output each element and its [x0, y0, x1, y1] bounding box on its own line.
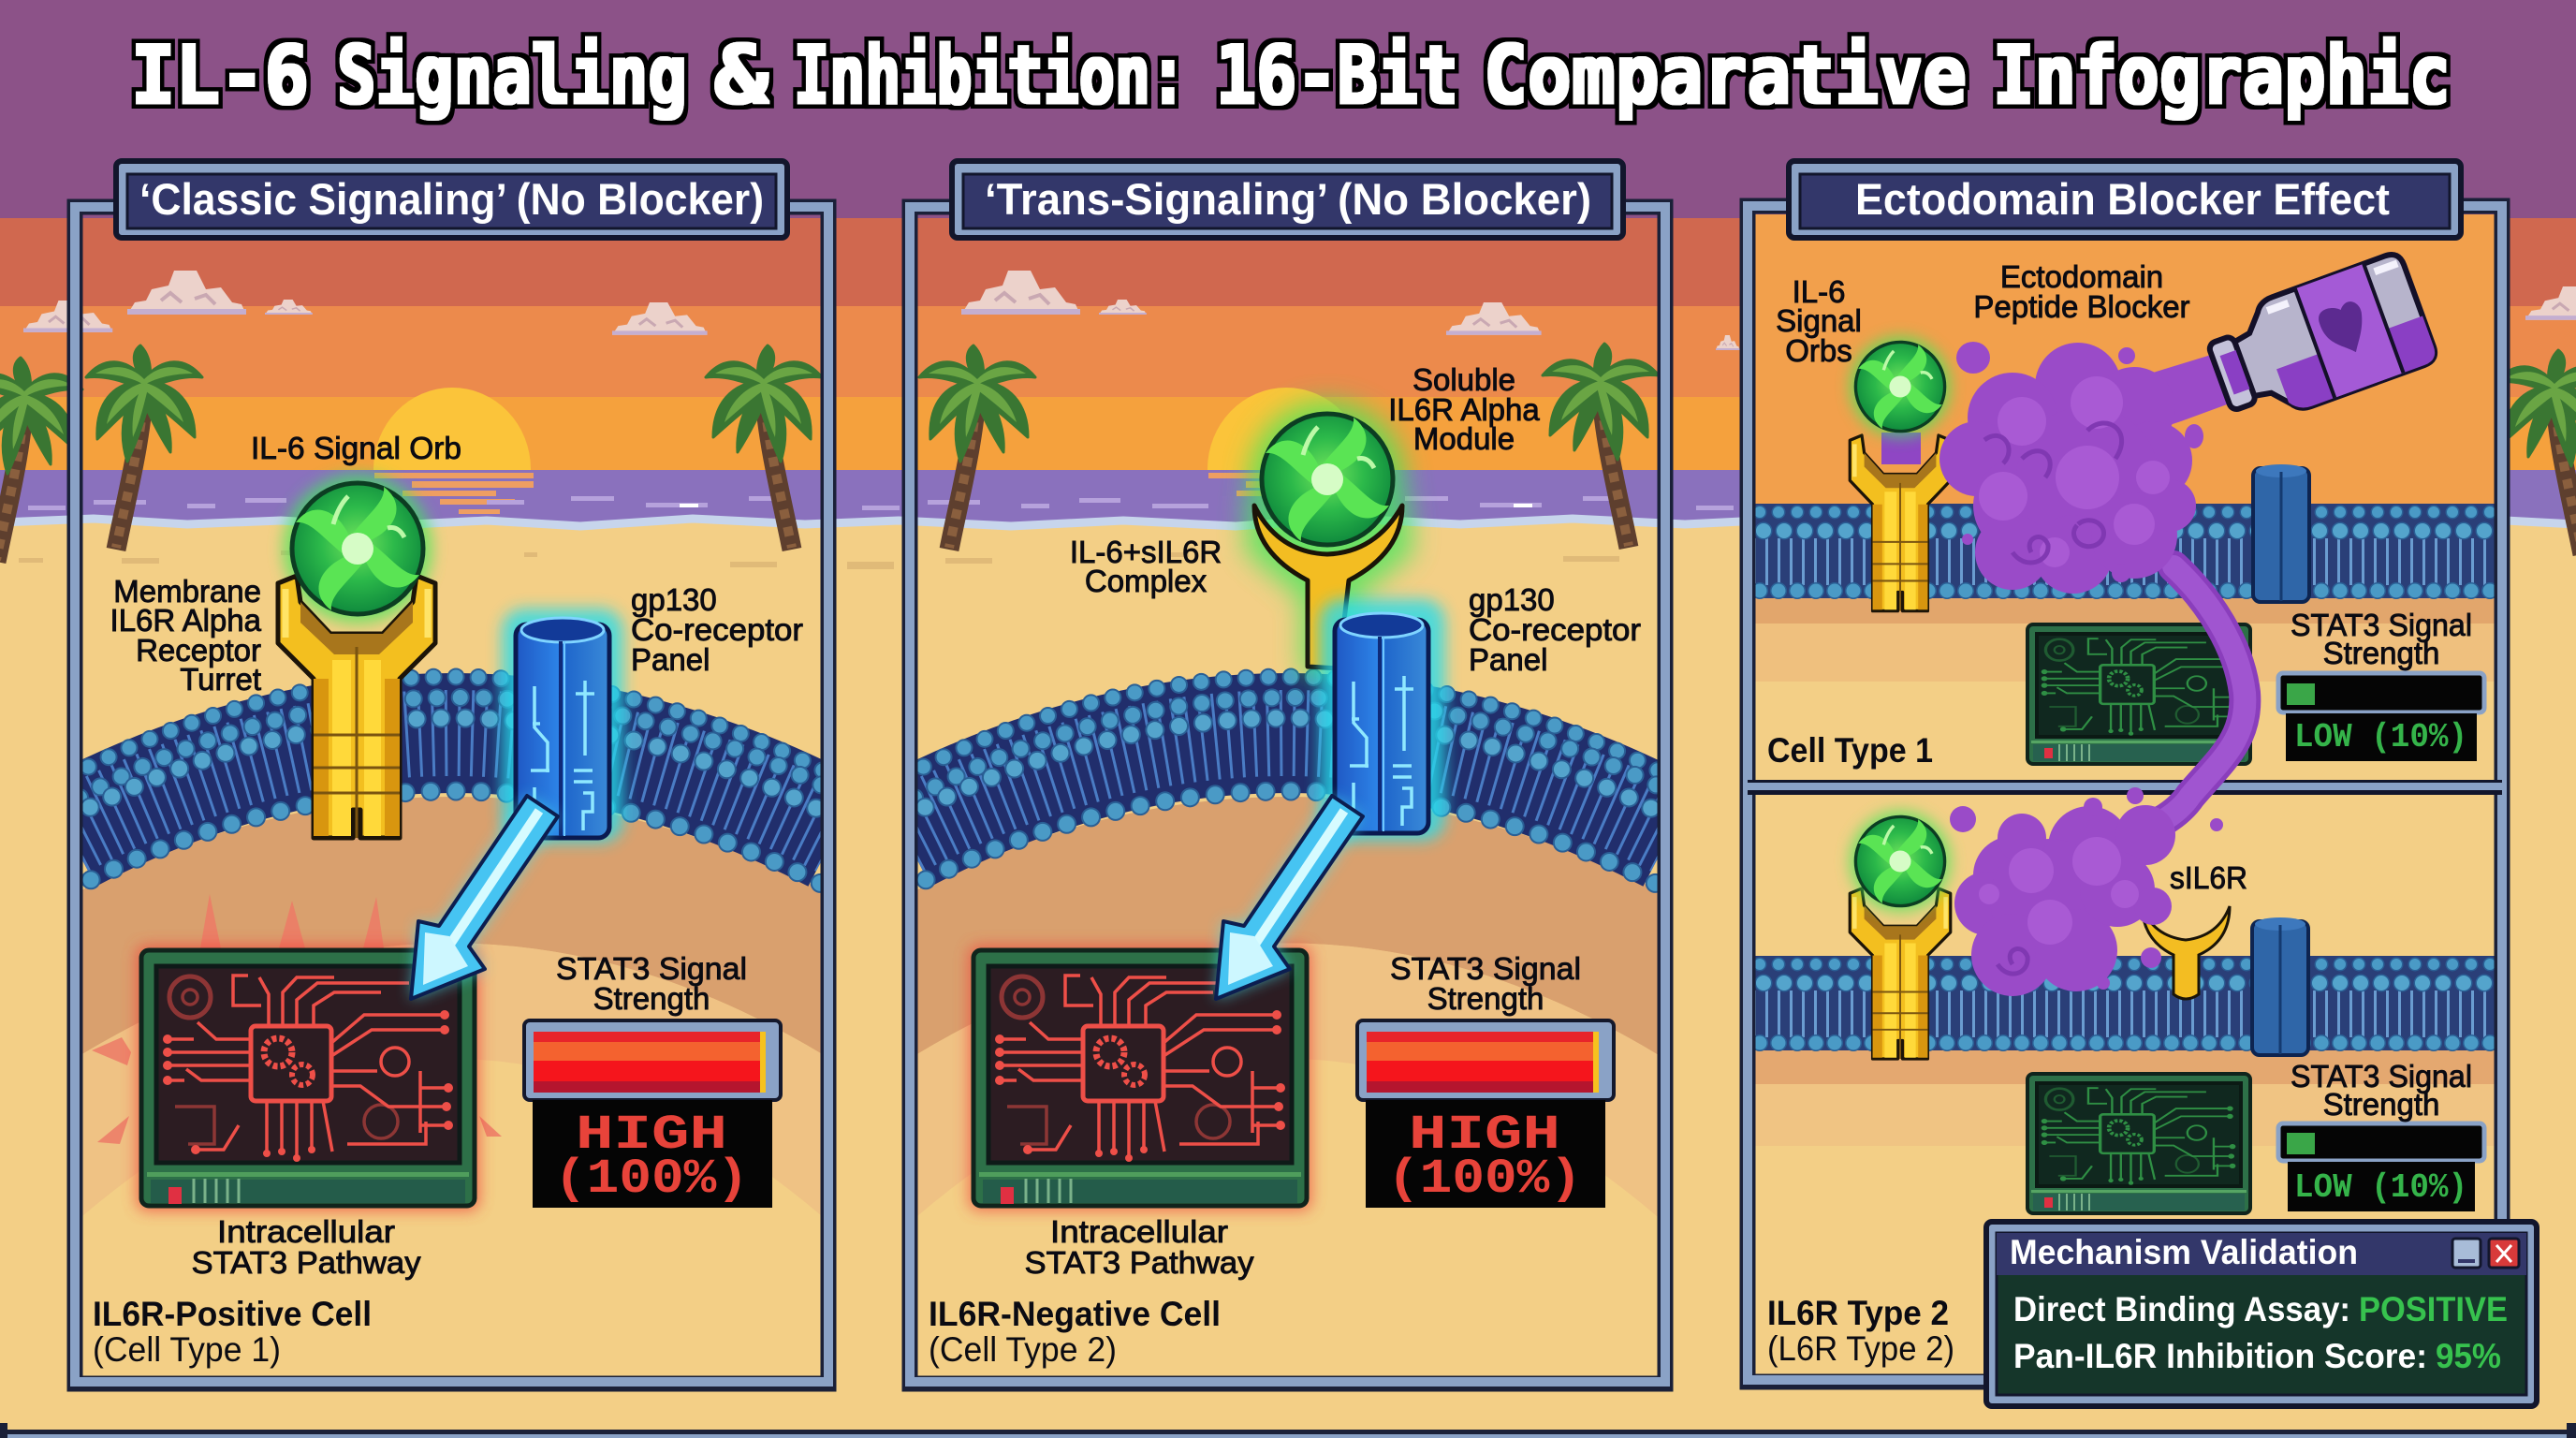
inhibition score result: Pan-IL6R Inhibition Score:: [2013, 1337, 2427, 1375]
mechanism validation window: Mechanism Validation: [2010, 1233, 2358, 1271]
label: IL-6 orbs: Signal: [1776, 303, 1862, 338]
cell interior floor: [68, 797, 836, 1228]
low signal meter: LOW (10%): [2294, 718, 2467, 756]
direct binding assay result: Direct Binding Assay:: [2013, 1290, 2350, 1328]
monitor glow: [137, 946, 479, 1211]
dim gp130 panel: [2252, 917, 2308, 1055]
IL-6 signal orb glow: [283, 474, 432, 624]
label: receptor turret: [110, 574, 262, 697]
title: Signaling: [337, 29, 687, 123]
signal readout: [1366, 1100, 1605, 1208]
IL-6+sIL6R complex glow: [1245, 401, 1413, 674]
IL-6 signal orb: [292, 483, 423, 614]
label: gp130: Panel: [631, 642, 710, 677]
panel heading plaque: ‘Trans-Signaling’ (No Blocker): [985, 174, 1591, 224]
panel heading plaque: [1789, 161, 2461, 238]
IL-6 signal orb: [1262, 414, 1393, 545]
cell type caption: IL6R-Negative Cell: [929, 1295, 1221, 1333]
cell type caption: IL6R-Positive Cell: [93, 1295, 372, 1333]
label: intracellular pathway: STAT3 Pathway: [191, 1245, 421, 1280]
title: IL-6: [131, 29, 309, 123]
title: Inhibition:: [794, 29, 1186, 123]
cell type caption: [93, 1295, 372, 1369]
blocked receptor plug: [1881, 433, 1921, 464]
label: intracellular pathway: [191, 1214, 421, 1280]
clouds: [23, 271, 2576, 350]
cell interior floor: [903, 797, 1671, 1228]
label: receptor turret: IL6R Alpha: [110, 603, 262, 638]
label: STAT3 signal strength: [1390, 951, 1581, 1016]
label: gp130: Co-receptor: [631, 612, 803, 647]
signal arrow: [1216, 796, 1363, 999]
label: IL-6 signal orb: IL-6 Signal Orb: [251, 431, 461, 465]
mechanism validation window: [1986, 1222, 2537, 1406]
title: &: [714, 29, 768, 123]
dim pathway monitor: [2027, 624, 2250, 764]
IL-6 signal orb: [1855, 816, 1945, 906]
caption: IL6R type 2: [1767, 1294, 1954, 1368]
label: ectodomain blocker: Ectodomain: [2000, 259, 2163, 294]
panel frame: [910, 207, 1665, 1384]
label: complex: Complex: [1085, 564, 1208, 598]
label: receptor turret: Membrane: [113, 574, 261, 609]
label: gp130: Co-receptor: [1469, 612, 1641, 647]
intracellular STAT3 pathway monitor: [973, 950, 1307, 1206]
blocker stream between sub-panels: [2106, 566, 2245, 847]
IL-6 signal orb: [1855, 342, 1945, 432]
label: soluble module: IL6R Alpha: [1388, 392, 1540, 427]
title: [131, 29, 2451, 123]
orb glow: [1850, 336, 1951, 437]
close button: [2489, 1239, 2519, 1268]
label: STAT3 signal strength: STAT3 Signal: [556, 951, 747, 986]
gp130 co-receptor glow: [502, 609, 623, 843]
label: STAT3 signal strength: STAT3 Signal: [1390, 951, 1581, 986]
label: STAT3 signal strength: [556, 951, 747, 1016]
receptor: [1850, 435, 1951, 611]
signal readout: HIGH: [1409, 1108, 1560, 1163]
outer bottom frame edge: [0, 1423, 2576, 1438]
label: receptor turret: Turret: [180, 662, 261, 697]
panel heading plaque: ‘Classic Signaling’ (No Blocker): [139, 174, 764, 224]
gp130 co-receptor panel: [1335, 613, 1428, 833]
panel frame: [1748, 206, 2502, 1382]
panel frame: [75, 207, 828, 1384]
upper sub-panel: cell type 1: [1753, 214, 2496, 786]
signal readout: [533, 1100, 772, 1208]
sandy floor: [1756, 598, 2494, 682]
membrane bilayer: [1753, 956, 2496, 1050]
panel: ectodomain blocker effect: [1748, 161, 2537, 1406]
title: Comparative: [1484, 29, 1967, 123]
label: intracellular pathway: STAT3 Pathway: [1024, 1245, 1254, 1280]
panel: trans-signaling: [903, 161, 1682, 1384]
low signal meter: LOW (10%): [2294, 1168, 2467, 1207]
monitor glow: [969, 946, 1311, 1211]
intracellular STAT3 pathway monitor: [141, 950, 475, 1206]
signal readout: (100%): [1387, 1152, 1582, 1207]
membrane IL6R alpha receptor turret: [278, 576, 435, 838]
dim pathway monitor: [2027, 1074, 2250, 1213]
soluble receptor sIL6R: [2142, 906, 2230, 999]
label: STAT3 signal strength: Strength: [593, 981, 710, 1016]
label: gp130: gp130: [631, 582, 717, 617]
signal readout: HIGH: [576, 1108, 727, 1163]
cell type caption: [929, 1295, 1221, 1369]
panel: classic signaling: [68, 161, 847, 1384]
label: gp130: [1469, 582, 1641, 677]
label: STAT3 signal strength: STAT3 Signal: [2291, 1059, 2472, 1093]
orb glow: [1850, 811, 1951, 912]
label: gp130: [631, 582, 803, 677]
gp130 co-receptor panel: [516, 618, 609, 838]
palm trees: [0, 344, 2576, 562]
direct binding assay result: POSITIVE: [2359, 1290, 2508, 1328]
label: IL-6 orbs: Orbs: [1785, 333, 1852, 368]
sandy floor: [1753, 794, 2496, 1375]
label: gp130: gp130: [1469, 582, 1555, 617]
panel heading plaque: Ectodomain Blocker Effect: [1855, 174, 2390, 224]
label: STAT3 signal strength: [2291, 608, 2472, 670]
signal meter bar: [1357, 1020, 1614, 1100]
panel heading plaque: [952, 161, 1623, 238]
caption: IL6R type 2: IL6R Type 2: [1767, 1294, 1949, 1332]
membrane bilayer: [1753, 504, 2496, 598]
dim gp130 panel: [2253, 464, 2309, 602]
panel heading plaque: [116, 161, 787, 238]
label: sIL6R: sIL6R: [2170, 860, 2247, 895]
label: complex: [1070, 535, 1222, 598]
ectodomain peptide blocker cloud: lower: [1950, 787, 2223, 996]
label: gp130: Panel: [1469, 642, 1547, 677]
title: 16-Bit: [1216, 29, 1458, 123]
cell membrane dome: [903, 677, 1682, 891]
blocker bottle: [2200, 251, 2438, 433]
label: STAT3 signal strength: Strength: [1427, 981, 1544, 1016]
low signal meter: [2278, 673, 2484, 761]
low signal meter: [2278, 1123, 2484, 1211]
signal readout: (100%): [554, 1152, 749, 1207]
label: IL-6 orbs: IL-6: [1793, 274, 1845, 309]
signal meter bar: [524, 1020, 781, 1100]
soluble IL6R alpha module: [1254, 506, 1402, 668]
inhibition score result: 95%: [2436, 1337, 2501, 1375]
label: soluble module: Module: [1413, 421, 1515, 456]
label: ectodomain blocker: Peptide Blocker: [1973, 289, 2190, 324]
sky backdrop: [1753, 214, 2496, 514]
label: STAT3 signal strength: Strength: [2323, 636, 2439, 670]
label: STAT3 signal strength: STAT3 Signal: [2291, 608, 2472, 642]
caption: IL6R type 2: (L6R Type 2): [1767, 1329, 1954, 1368]
ectodomain peptide blocker cloud: upper: [1939, 342, 2237, 594]
red sparks: [92, 894, 502, 1144]
caption: cell type 1: Cell Type 1: [1767, 731, 1933, 770]
signal arrow: [411, 796, 558, 999]
cell type caption: (Cell Type 1): [93, 1330, 281, 1369]
label: STAT3 signal strength: [2291, 1059, 2472, 1122]
gp130 co-receptor glow: [1320, 599, 1445, 841]
lower sub-panel: type 2: [1753, 794, 2496, 1375]
label: intracellular pathway: [1024, 1214, 1254, 1280]
label: receptor turret: Receptor: [136, 633, 261, 668]
title: Infographic: [1993, 29, 2451, 123]
label: intracellular pathway: Intracellular: [1050, 1214, 1228, 1249]
minimize button: [2452, 1239, 2481, 1268]
label: soluble module: [1388, 362, 1540, 456]
cell type caption: (Cell Type 2): [929, 1330, 1117, 1369]
cell membrane dome: [68, 677, 847, 891]
label: complex: IL-6+sIL6R: [1070, 535, 1222, 569]
label: soluble module: Soluble: [1412, 362, 1515, 397]
label: intracellular pathway: Intracellular: [217, 1214, 395, 1249]
label: IL-6 orbs: [1776, 274, 1862, 368]
label: STAT3 signal strength: Strength: [2323, 1087, 2439, 1122]
receptor: [1850, 888, 1951, 1059]
label: ectodomain blocker: [1973, 259, 2190, 324]
